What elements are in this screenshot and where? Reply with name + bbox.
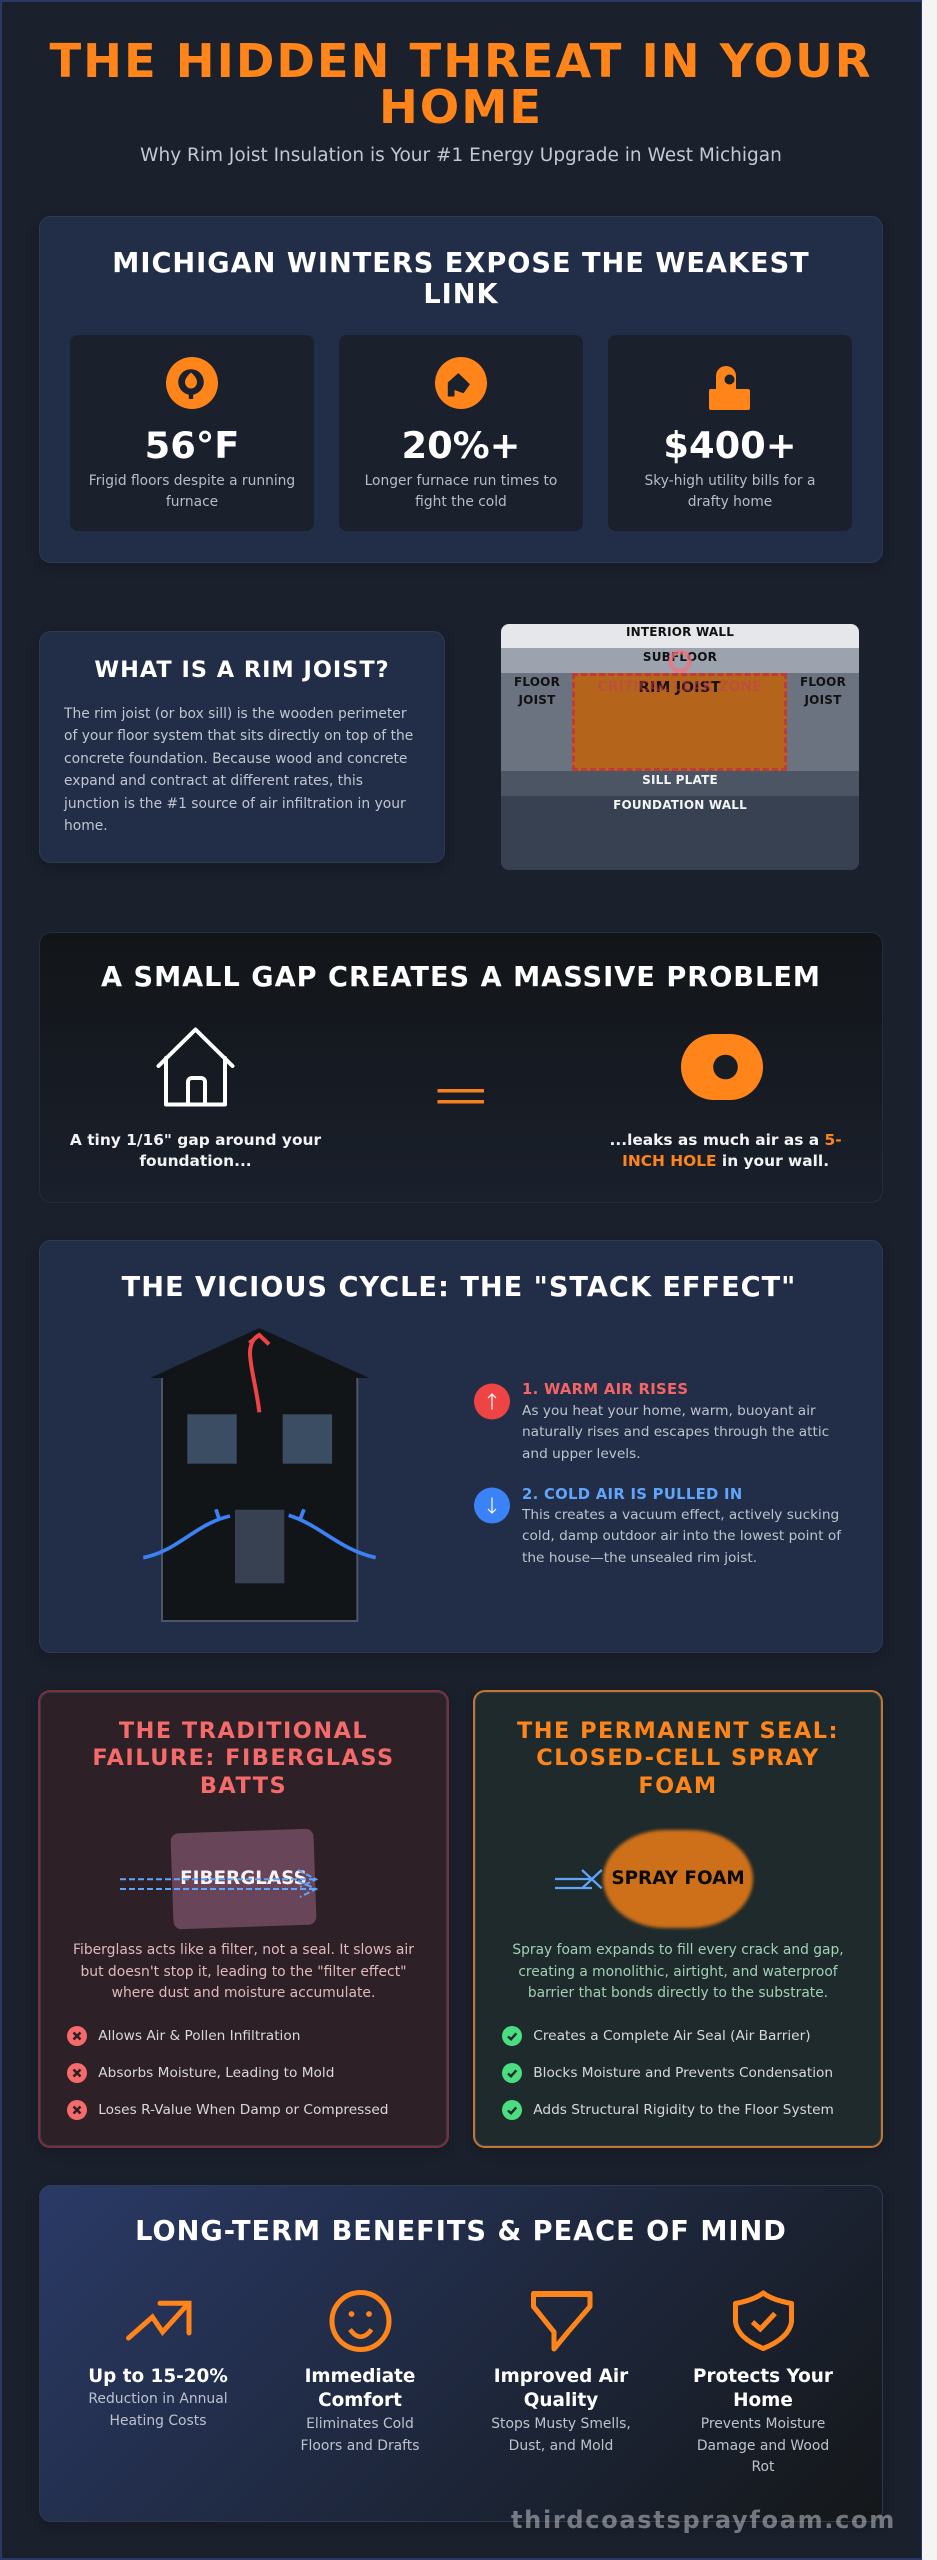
explanation text: junction is the #1 source of air infiltration in your [64,796,406,812]
spray foam label: SPRAY FOAM [611,1868,745,1889]
left caption: foundation... [139,1152,252,1170]
layer: floor joist right: FLOOR [800,675,846,689]
label: critical leak zone: CRITICAL LEAK ZONE [597,679,762,695]
panel heading: FOAM [638,1772,718,1798]
list: advantages [502,2026,834,2120]
icon: up arrow badge [474,1384,510,1420]
panel: long-term benefits [39,2185,883,2522]
benefit heading: Comfort [318,2390,402,2411]
explanation text: The rim joist (or box sill) is the wooden perimeter [64,706,407,722]
house roof [150,1328,369,1378]
door [235,1510,284,1583]
panel heading [517,1718,839,1798]
panel heading: LONG-TERM BENEFITS & PEACE OF MIND [135,2216,787,2247]
benefit heading: Up to 15-20% [88,2366,228,2387]
description: but doesn't stop it, leading to the "filter effect" [80,1964,407,1980]
step 2 text [522,1507,842,1566]
list: drawbacks [67,2026,388,2120]
panel heading [92,1718,395,1798]
benefit text: Damage and Wood [697,2438,829,2454]
stat description [645,472,815,510]
advantage 2: Blocks Moisture and Prevents Condensation [533,2065,833,2081]
panel heading: LINK [423,279,499,310]
step 1 text: As you heat your home, warm, buoyant air [522,1403,816,1419]
stat card: $400+ [608,334,852,531]
panel heading: CLOSED-CELL SPRAY [536,1745,820,1771]
step 1 text [522,1403,829,1462]
stat description [89,472,295,510]
subtitle: Why Rim Joist Insulation is Your #1 Energy Upgrade in West Michigan [140,145,782,166]
icon: down arrow badge [474,1488,510,1524]
panel: what is a rim joist [39,631,445,863]
panel: Michigan winters [39,216,883,563]
icon: equals sign [438,1089,484,1104]
explanation text: home. [64,818,108,834]
panel heading: BATTS [200,1772,287,1798]
layer: subfloor [501,648,859,673]
arrow: warm air rising [249,1335,269,1412]
drawback 2: Absorbs Moisture, Leading to Mold [98,2065,334,2081]
icon: cost tag [709,366,750,410]
benefit text [88,2391,228,2429]
benefit text: Eliminates Cold [306,2416,414,2432]
title: HOME [379,80,543,134]
stat description: Frigid floors despite a running [89,472,295,488]
step 2 text: cold, damp outdoor air into the lowest point of [522,1528,841,1544]
panel heading: FAILURE: FIBERGLASS [92,1745,395,1771]
panel: stack effect [39,1240,883,1653]
title [49,34,873,134]
benefit text: Heating Costs [110,2413,206,2429]
description [512,1942,844,2001]
upper windows [187,1414,332,1464]
right caption [610,1131,842,1170]
layer: floor joist left [501,673,573,771]
icon: five-inch hole [681,1034,763,1100]
panel heading: MICHIGAN WINTERS EXPOSE THE WEAKEST [112,248,810,279]
layer: foundation wall: FOUNDATION WALL [613,798,747,812]
stat description: drafty home [688,494,772,510]
description: creating a monolithic, airtight, and waterproof [518,1964,838,1980]
benefit text [461,2414,661,2457]
advantage 1: Creates a Complete Air Seal (Air Barrier) [533,2028,811,2044]
spray foam blob [603,1830,753,1928]
panel heading: THE TRADITIONAL [119,1718,368,1744]
benefit heading [461,2365,661,2413]
layer: subfloor: SUBFLOOR [643,650,717,664]
description [73,1942,414,2001]
benefit heading: Quality [524,2390,598,2411]
stat description: furnace [166,494,218,510]
explanation text: of your floor system that sits directly on top of the [64,728,413,744]
fiberglass label: FIBERGLASS [180,1868,307,1889]
benefit text: Floors and Drafts [300,2438,420,2454]
fiberglass batt [170,1829,317,1929]
stat description [365,472,557,510]
icon: flame [435,357,487,409]
drawback 3: Loses R-Value When Damp or Compressed [98,2102,388,2118]
panel: small gap massive problem [39,932,883,1203]
explanation text [64,706,413,834]
benefit text [260,2414,460,2457]
stat number: $400+ [663,424,797,466]
benefit text: Rot [752,2459,774,2475]
right caption: INCH HOLE in your wall. [622,1152,829,1170]
step 1 text: naturally rises and escapes through the attic [522,1424,829,1440]
benefit text [663,2414,863,2478]
icon: shield [731,2289,795,2353]
layer: interior wall: INTERIOR WALL [626,625,734,639]
left caption [70,1131,322,1170]
panel heading [112,248,810,310]
explanation text: concrete foundation. Because wood and concrete [64,751,407,767]
layer: interior wall [501,624,859,648]
drawback 1 [67,2026,300,2046]
layer: rim joist critical zone [572,673,787,771]
panel heading: THE PERMANENT SEAL: [517,1718,839,1744]
description: barrier that bonds directly to the substrate. [528,1985,828,2001]
step 2 text: the house—the unsealed rim joist. [522,1550,757,1566]
stat description: Sky-high utility bills for a [645,472,815,488]
benefit text: Prevents Moisture [701,2416,825,2432]
icon: trend up [126,2300,192,2340]
drawback 1: Allows Air & Pollen Infiltration [98,2028,300,2044]
benefit heading: Improved Air [494,2366,628,2387]
layer: floor joist left: JOIST [519,693,555,707]
benefit text: Reduction in Annual [88,2391,228,2407]
layer: sill plate: SILL PLATE [642,773,718,787]
stat card: 20%+ [339,334,583,531]
benefit: air quality [461,2285,661,2465]
label: rim joist: RIM JOIST [638,678,721,696]
layer: foundation wall [501,796,859,870]
arrow: cold air right [289,1509,376,1558]
website watermark: thirdcoastsprayfoam.com [511,2506,896,2534]
description: Spray foam expands to fill every crack and gap, [512,1942,844,1958]
diagram: house with air flow [143,1328,376,1622]
description: Fiberglass acts like a filter, not a seal. It slows air [73,1942,414,1958]
title: THE HIDDEN THREAT IN YOUR [49,34,873,88]
description: where dust and moisture accumulate. [112,1985,375,2001]
layer: floor joist right: JOIST [805,693,841,707]
advantage 3: Adds Structural Rigidity to the Floor System [533,2102,834,2118]
house wall outline [162,1378,357,1621]
arrow: cold air left [143,1509,230,1558]
icon: thermometer [166,357,218,409]
stat number: 20%+ [402,424,520,466]
panel: fiberglass failure [38,1690,449,2148]
stat description: Longer furnace run times to [365,472,557,488]
right caption: ...leaks as much air as a 5- [610,1131,842,1149]
panel heading: WHAT IS A RIM JOIST? [94,657,390,683]
leak marker ring [668,650,692,674]
benefit: comfort [300,2290,420,2454]
arrows: air passing through [120,1869,318,1898]
panel heading: THE VICIOUS CYCLE: THE "STACK EFFECT" [122,1272,796,1302]
step 1 heading: 1. WARM AIR RISES [522,1381,688,1398]
panel: spray foam seal [473,1690,883,2148]
explanation text: expand and contract at different rates, this [64,773,363,789]
benefit heading: Protects Your [693,2366,833,2387]
layer: sill plate [501,771,859,796]
stat description: fight the cold [415,494,507,510]
benefit heading: Immediate [305,2366,415,2387]
layer: floor joist left: FLOOR [514,675,560,689]
layer: floor joist right [787,673,859,771]
icon: smile [330,2290,392,2352]
benefit heading [305,2366,415,2411]
benefit heading: Home [733,2390,793,2411]
step 1 text: and upper levels. [522,1446,641,1462]
benefit heading [663,2365,863,2413]
step 2 heading: 2. COLD AIR IS PULLED IN [522,1486,743,1502]
benefit: heating costs [88,2300,228,2429]
house body [162,1378,357,1621]
stat card: 56°F [70,334,314,531]
diagram: rim joist cross-section [501,624,859,870]
benefit text: Stops Musty Smells, [491,2416,631,2432]
icon: house outline [156,1027,235,1106]
left caption: A tiny 1/16" gap around your [70,1131,321,1149]
arrows: air blocked [555,1869,602,1890]
benefit: protects home [663,2285,863,2465]
step 2 text: This creates a vacuum effect, actively sucking [522,1507,839,1523]
panel heading: A SMALL GAP CREATES A MASSIVE PROBLEM [101,962,821,993]
stat number: 56°F [145,424,239,466]
benefit text: Dust, and Mold [509,2438,613,2454]
icon: funnel [529,2289,593,2353]
